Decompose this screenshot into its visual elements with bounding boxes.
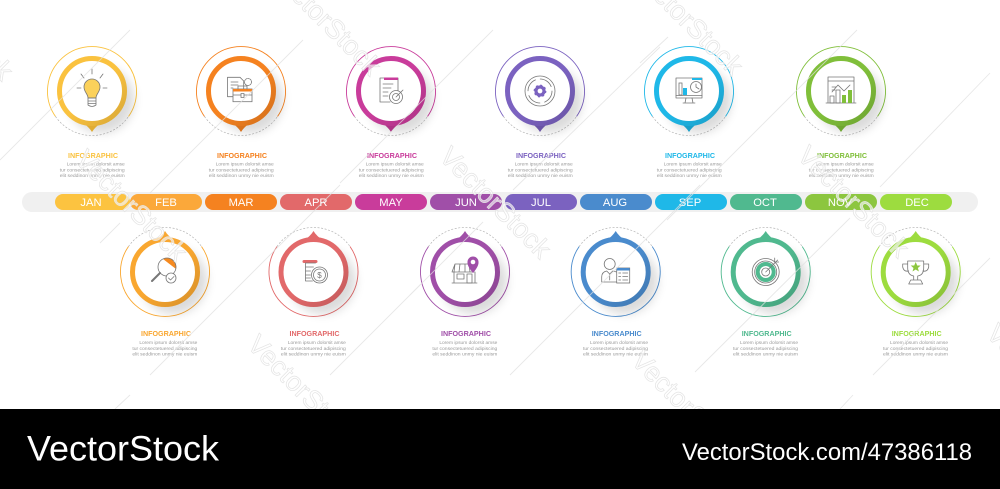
text block: Lorem ipsum dolorsit amse	[67, 162, 125, 167]
month pills: NOV	[828, 197, 853, 209]
text block: elit seddinon unmy nie euism	[281, 352, 346, 356]
month pills: OCT	[753, 197, 777, 209]
month pills: FEB	[155, 197, 177, 209]
text block	[209, 162, 274, 178]
text block	[657, 162, 722, 178]
brand name: VectorStock	[27, 428, 219, 468]
heading: INFOGRAPHIC	[892, 329, 942, 338]
month pills: DEC	[905, 197, 929, 209]
text block	[359, 162, 424, 178]
text block: Lorem ipsum dolorsit amse	[139, 340, 198, 345]
heading: INFOGRAPHIC	[441, 329, 492, 338]
text block	[733, 340, 798, 356]
text block: Lorem ipsum dolorsit amse	[216, 162, 274, 167]
icon: person with card	[602, 258, 630, 283]
text block: elit seddinon unmy nie euism	[432, 352, 497, 356]
panel: May	[346, 47, 436, 178]
panel: August	[571, 227, 660, 356]
icon: trophy with star	[903, 261, 929, 284]
heading: INFOGRAPHIC	[68, 151, 119, 160]
heading: INFOGRAPHIC	[516, 151, 567, 160]
heading: INFOGRAPHIC	[592, 329, 642, 338]
text block: elit seddinon unmy nie euism	[60, 173, 125, 178]
icon: magnifier with check	[152, 258, 176, 283]
month pills	[55, 194, 952, 210]
icon: store with location pin	[452, 256, 479, 283]
panel: October	[721, 227, 810, 356]
text block: Lorem ipsum dolorsit amse	[439, 340, 498, 345]
image reference: VectorStock.com/47386118	[682, 439, 972, 466]
watermark overlay: VectorStock	[626, 345, 749, 468]
text block: elit seddinon unmy nie euism	[883, 352, 948, 356]
icon: monitor with chart	[676, 78, 702, 103]
month pills: JUN	[455, 197, 477, 209]
text block: elit seddinon unmy nie euism	[359, 173, 424, 178]
text block	[508, 162, 573, 178]
text block: tur consectetuered adipiscing	[508, 168, 573, 172]
text block	[432, 340, 498, 356]
text block: tur consectetuered adipiscing	[359, 168, 424, 172]
text block	[281, 340, 346, 356]
text block: elit seddinon unmy nie euism	[583, 352, 648, 356]
text block: tur consectetuered adipiscing	[809, 168, 874, 172]
footer band	[0, 409, 1000, 489]
panel: June	[420, 227, 510, 356]
panel: December	[871, 227, 960, 356]
watermark overlay: VectorStock	[434, 141, 557, 264]
text block: Lorem ipsum dolorsit amse	[664, 162, 722, 167]
text block: elit seddinon unmy nie euism	[657, 173, 722, 178]
text block: tur consectetuered adipiscing	[733, 346, 798, 351]
text block: Lorem ipsum dolorsit amse	[816, 162, 874, 167]
icon: target with arrow	[752, 258, 779, 286]
icon: checklist and target	[380, 78, 403, 104]
text block: tur consectetuered adipiscing	[60, 168, 125, 172]
text block: tur consectetuered adipiscing	[883, 346, 948, 351]
text block: Lorem ipsum dolorsit amse	[740, 340, 798, 345]
month pills: MAR	[229, 197, 253, 209]
panel: February	[120, 227, 210, 356]
icon: gear in cycle	[525, 76, 555, 106]
text block: Lorem ipsum dolorsit amse	[590, 340, 648, 345]
text block: tur consectetuered adipiscing	[432, 346, 498, 351]
icon: light bulb	[77, 69, 107, 106]
month pills: SEP	[679, 197, 701, 209]
text block: elit seddinon unmy nie euism	[809, 173, 874, 178]
text block: tur consectetuered adipiscing	[583, 346, 648, 351]
text block	[809, 162, 874, 178]
heading: INFOGRAPHIC	[367, 151, 418, 160]
text block	[60, 162, 125, 178]
text block: Lorem ipsum dolorsit amse	[366, 162, 424, 167]
text block: elit seddinon unmy nie euism	[508, 173, 573, 178]
text block: tur consectetuered adipiscing	[281, 346, 346, 351]
heading: INFOGRAPHIC	[742, 329, 792, 338]
panel: March	[196, 47, 286, 178]
text block: Lorem ipsum dolorsit amse	[288, 340, 346, 345]
text block	[583, 340, 648, 356]
month pills: JUL	[531, 197, 551, 209]
text block: tur consectetuered adipiscing	[209, 168, 274, 172]
watermark overlay: VectorStock	[70, 144, 193, 267]
timeline track	[22, 192, 978, 212]
heading: INFOGRAPHIC	[665, 151, 716, 160]
heading: INFOGRAPHIC	[141, 329, 192, 338]
text block: elit seddinon unmy nie euism	[733, 352, 798, 356]
text block: elit seddinon unmy nie euism	[209, 173, 274, 178]
text block: Lorem ipsum dolorsit amse	[890, 340, 948, 345]
panel: September	[644, 47, 734, 178]
panel: January	[47, 47, 136, 178]
icon: browser with charts	[826, 77, 856, 103]
text block: tur consectetuered adipiscing	[132, 346, 198, 351]
watermark overlay: VectorStock	[792, 140, 915, 263]
text block: tur consectetuered adipiscing	[657, 168, 722, 172]
text block	[883, 340, 948, 356]
heading: INFOGRAPHIC	[817, 151, 868, 160]
text block: Lorem ipsum dolorsit amse	[515, 162, 573, 167]
panel: November	[796, 47, 886, 178]
panel: July	[496, 47, 584, 178]
month pills: APR	[304, 197, 328, 209]
watermark overlay: VectorStock	[242, 329, 365, 452]
panel: April	[269, 227, 358, 356]
text block	[132, 340, 198, 356]
month pills: AUG	[603, 197, 627, 209]
month pills: JAN	[80, 197, 102, 209]
heading: INFOGRAPHIC	[217, 151, 268, 160]
month pills: MAY	[379, 197, 403, 209]
heading: INFOGRAPHIC	[290, 329, 340, 338]
icon: documents and briefcase	[228, 77, 252, 102]
icon: coins: $	[317, 271, 322, 280]
text block: elit seddinon unmy nie euism	[132, 352, 197, 356]
